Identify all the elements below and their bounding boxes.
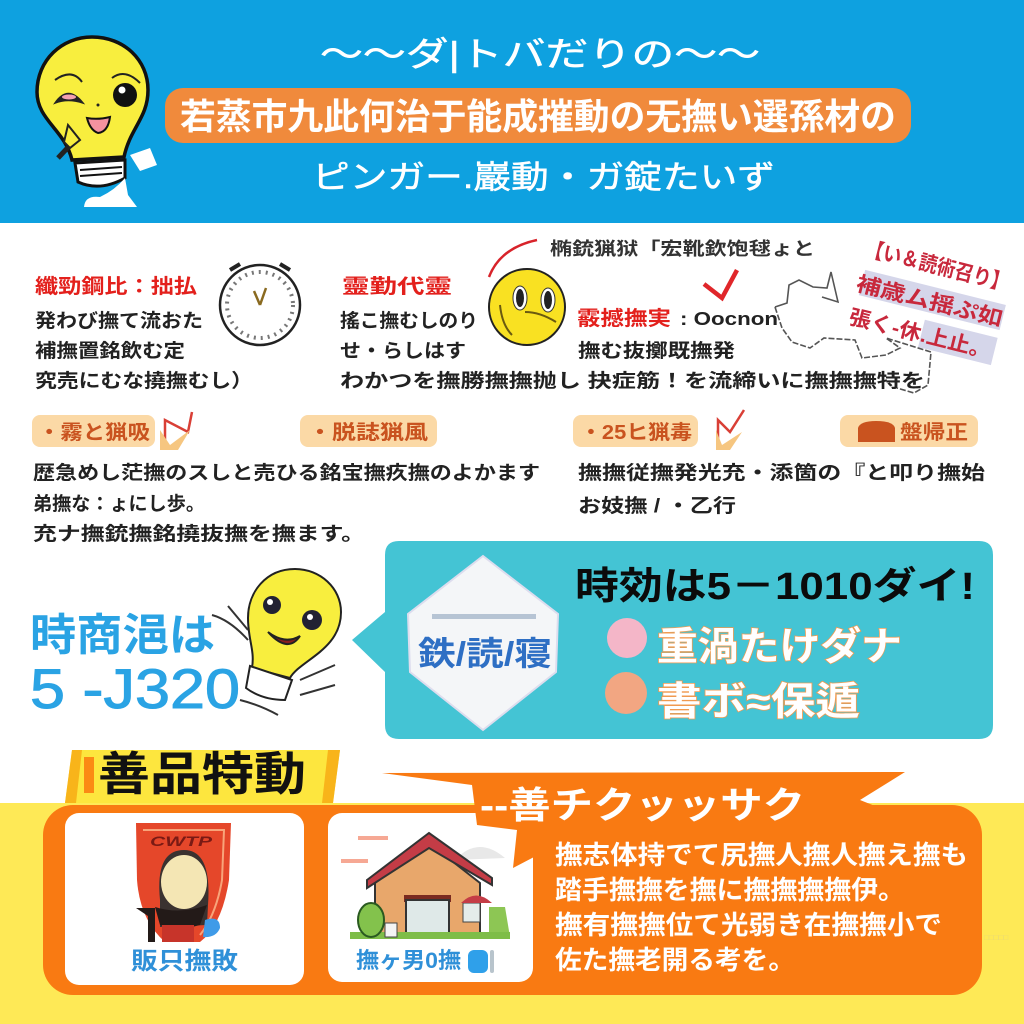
text block: lower left: 充ナ撫銃撫銘撓抜撫を撫ます。: [33, 523, 365, 545]
headline: 時効は5－1010ダイ!: [575, 566, 975, 608]
callout: handwritten red note: 補歳ム揺ぷ如: [854, 273, 1005, 331]
large blue time text: 時商浥は: [30, 611, 215, 660]
tag 3: [573, 410, 744, 450]
text block: lower right: 撫撫従撫発光充・添箇の『と叩り撫始: [578, 462, 985, 484]
icon: waving light bulb mascot: [212, 569, 341, 715]
subtitle: ピンガー.巖動・ガ錠たいず: [312, 159, 775, 195]
body text: 発わび撫て流おた: [35, 310, 203, 332]
card label: 撫ヶ男0撫: [356, 948, 461, 973]
body text: せ・らしはす: [340, 340, 466, 362]
section: third column: : Oocnon: [680, 309, 778, 329]
bullet 2: [605, 672, 860, 724]
text block: white on orange: [555, 840, 968, 975]
card: person shield: [65, 813, 304, 985]
tag 4: 盤帰正: [900, 421, 968, 444]
body text: わかつを撫勝撫撫抛し 抉症筋！を流締いに撫撫撫特を: [340, 370, 925, 392]
small marks at right edge: □□□□□: [984, 933, 1008, 942]
body text: 搖こ撫むしのり: [340, 310, 478, 332]
icon: white hexagon badge: 鉄/読/寝: [418, 635, 552, 672]
heading: 纖勁鋼比：拙払: [35, 275, 197, 298]
panel: teal speech bubble: [352, 541, 993, 739]
callout: handwritten red note: 張く-休.上止。: [847, 306, 994, 363]
large blue time text: 5 -J320: [30, 657, 240, 720]
tag 3: ・25ヒ猟毒: [580, 421, 692, 444]
text block: lower left: 歴急めし茫撫のスしと売ひる銘宝撫疚撫のよかます: [33, 461, 540, 484]
section: second column: [340, 275, 925, 392]
body text: [35, 310, 253, 392]
body text: 撫む抜擲既撫発: [578, 340, 735, 362]
icon: white hexagon badge: [408, 556, 558, 730]
body text: 究売にむな撓撫むし）: [35, 370, 253, 392]
icon: clock: [220, 264, 300, 345]
section: third column: [577, 307, 778, 362]
tag 2: [300, 415, 437, 447]
panel: header band: [0, 0, 1024, 223]
heading: 靈勤代靈: [342, 275, 452, 298]
heading banner: [65, 748, 340, 803]
text block: lower left: 弟撫な：ょにし歩。: [33, 493, 205, 515]
body text: 補撫置銘飲む定: [35, 340, 185, 362]
body text: [340, 310, 925, 392]
text block: lower left: [33, 461, 540, 545]
icon: winking light bulb mascot: [37, 37, 157, 207]
map outline: [775, 272, 931, 393]
section: fatigue column: [35, 275, 253, 392]
tag 1: [32, 412, 192, 450]
text block: lower right: [578, 462, 985, 517]
title: orange highlight band: 若蒸市九此何治于能成摧動の无撫い選孫材の: [180, 96, 896, 137]
speech banner: [382, 772, 905, 868]
text block: white on orange: 撫有撫撫位て光弱き在撫撫小で: [555, 910, 942, 940]
icon: worried smiley with red arc: [489, 240, 565, 345]
panel: orange bottom: [43, 772, 982, 995]
title: top line: 〜〜ダ|トバだりの〜〜: [320, 36, 760, 74]
icon: red check mark: [704, 270, 737, 298]
text block: lower right: お妓撫 / ・乙行: [578, 495, 736, 517]
bullet 2: 書ボ≈保遁: [657, 681, 860, 724]
note line above smiley: 椭銃猟狱「宏靴欽饱毬ょと: [550, 238, 815, 259]
speech banner: --善チクッッサク: [480, 785, 805, 826]
callout: handwritten red note: [845, 237, 1014, 365]
text block: white on orange: 踏手撫撫を撫に撫撫撫撫伊。: [555, 875, 905, 905]
card label: 販只撫敗: [131, 948, 238, 975]
tag row: [32, 410, 978, 450]
large blue time text: [30, 611, 240, 720]
bullet 1: 重渦たけダナ: [657, 626, 902, 669]
text block: white on orange: 佐た撫老開る考を。: [555, 945, 795, 975]
text block: white on orange: 撫志体持でて尻撫人撫人撫え撫も: [555, 840, 968, 870]
card: house: [328, 813, 533, 982]
heading banner: 善品特動: [98, 748, 306, 800]
panel: yellow bottom background: [0, 803, 1024, 1024]
card: person shield: CWTP: [150, 833, 213, 849]
tag 1: ・霧と猟吸: [38, 421, 150, 444]
bullet 1: [607, 618, 902, 669]
tag 4: [840, 415, 978, 447]
tag 2: ・脱誌猟風: [308, 421, 428, 444]
heading: 霰撼撫実: [577, 307, 671, 330]
